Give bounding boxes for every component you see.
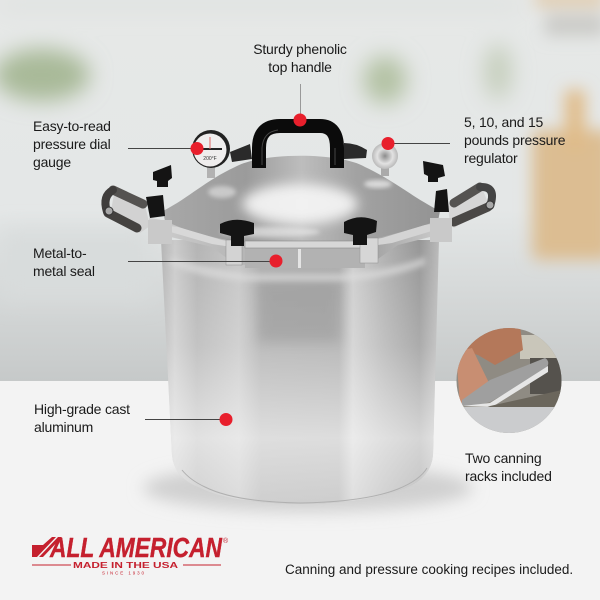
label: top handle xyxy=(253,41,347,75)
label: metal seal: Metal-to- xyxy=(33,245,86,261)
label: dial gauge xyxy=(33,118,111,170)
lid dome and rim xyxy=(148,156,452,268)
label: regulator xyxy=(464,114,565,166)
label: canning racks: Two canning xyxy=(465,450,541,466)
label: canning racks: racks included xyxy=(465,468,552,484)
canner pot body xyxy=(161,240,439,504)
label: top handle: Sturdy phenolic xyxy=(253,41,347,57)
label: metal seal xyxy=(33,245,95,279)
icon: canning rack photo circle xyxy=(456,328,562,433)
label: metal seal: metal seal xyxy=(33,263,95,279)
logo: All American: SINCE 1930 xyxy=(102,570,144,576)
white counter top xyxy=(0,381,600,600)
label: dial gauge: pressure dial xyxy=(33,136,111,152)
label: dial gauge: gauge xyxy=(33,154,71,170)
wing nut clamps xyxy=(146,161,449,246)
label: regulator: pounds pressure xyxy=(464,132,565,148)
pressure regulator xyxy=(372,143,398,176)
label: cast aluminum xyxy=(34,401,130,435)
logo: All American: ® xyxy=(223,537,229,545)
label: regulator: 5, 10, and 15 xyxy=(464,114,543,130)
label: recipes: Canning and pressure cooking recipes included. xyxy=(285,562,573,577)
label: top handle: top handle xyxy=(268,59,332,75)
logo: All American: MADE IN THE USA xyxy=(73,560,178,570)
rear knobs xyxy=(230,143,367,162)
label: cast aluminum: High-grade cast xyxy=(34,401,130,417)
pressure dial gauge: 200°F xyxy=(203,156,217,162)
logo: All American: ALL AMERICAN xyxy=(49,532,223,563)
right side handle xyxy=(448,187,494,228)
blurred kitchen wall xyxy=(0,0,600,381)
label: dial gauge: Easy-to-read xyxy=(33,118,111,134)
top phenolic handle xyxy=(259,126,337,168)
label: regulator: regulator xyxy=(464,150,517,166)
label: canning racks xyxy=(465,450,552,484)
left side handle xyxy=(105,190,150,233)
label: cast aluminum: aluminum xyxy=(34,419,93,435)
pressure dial gauge xyxy=(192,130,230,178)
